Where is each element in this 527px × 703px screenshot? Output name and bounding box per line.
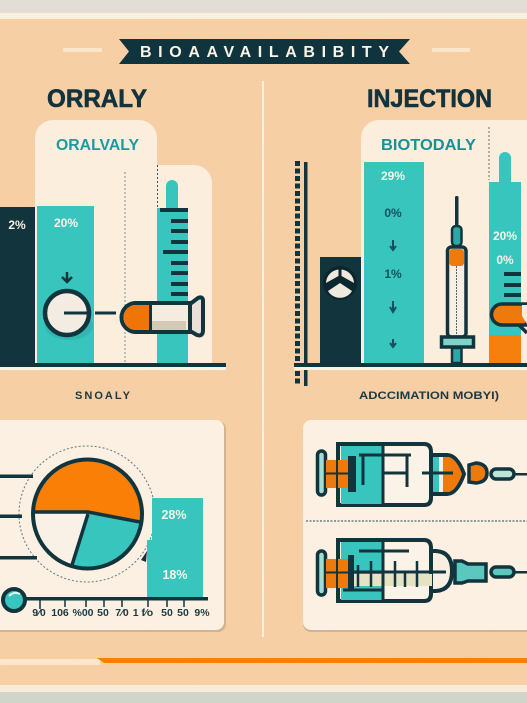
chart backdrop	[361, 120, 527, 365]
teal bar: 20%	[54, 216, 78, 230]
caption: injection: ADCCIMATION MOBYI)	[359, 390, 499, 402]
dashed guide	[488, 127, 490, 180]
panel: injection bar chart	[294, 120, 527, 386]
scale labels: 9%	[194, 607, 210, 619]
teal gauge with values: 20%	[493, 229, 517, 243]
dark bar	[0, 207, 35, 363]
caption: oral: SNOALY	[75, 390, 131, 402]
scale labels: 50	[177, 607, 189, 619]
icon: upright syringe	[442, 196, 474, 363]
scale labels: %00	[72, 607, 94, 619]
icon: capsule cropped	[492, 304, 527, 333]
scale labels: 50	[97, 607, 109, 619]
teal bar with values: 1%	[384, 267, 402, 281]
chart backdrop	[35, 120, 212, 365]
dashed ring	[19, 446, 155, 582]
arrow tip	[141, 551, 147, 562]
teal gauge with values: 0%	[496, 253, 514, 267]
title side dashes	[63, 48, 470, 52]
dotted separator	[306, 520, 527, 522]
chart label: ORALVALY	[56, 137, 139, 154]
scale labels: 9⁄0	[32, 607, 46, 619]
teal bar with values: 0%	[384, 206, 402, 220]
teal value bar	[147, 498, 203, 597]
panel: oral bar chart	[0, 120, 226, 370]
dark bar: 2%	[8, 218, 26, 232]
panel: syringes card	[303, 420, 527, 632]
teal value bar: 28%	[161, 508, 187, 522]
teal bar with values: 29%	[381, 169, 405, 183]
chart label: BIOTODALY	[381, 137, 476, 154]
pie chart	[31, 458, 144, 570]
icon: capsule	[122, 297, 203, 335]
scale labels: 1 f⁄o	[133, 607, 153, 619]
icon: syringe top	[318, 444, 527, 505]
leader lines	[0, 474, 37, 560]
card	[303, 420, 527, 632]
icon: syringe bottom	[318, 540, 527, 601]
scale labels	[32, 607, 210, 619]
teal gauge	[157, 180, 188, 363]
heading: orally: ORRALY	[47, 85, 147, 113]
scale labels: 106	[51, 607, 69, 619]
card	[0, 420, 226, 632]
dark bar with icon	[320, 257, 361, 363]
teal value bar: 18%	[162, 568, 188, 582]
title ribbon	[119, 39, 410, 64]
teal bar with values	[364, 162, 424, 363]
footer progress bar	[0, 658, 527, 665]
vertical scale	[298, 161, 308, 386]
axis	[0, 363, 226, 370]
heading: injection: INJECTION	[367, 85, 492, 113]
teal gauge with values	[489, 152, 521, 363]
center divider	[262, 81, 264, 637]
icon: down arrow	[62, 272, 72, 282]
icon: tablet	[45, 291, 116, 340]
panel: pie chart card	[0, 420, 226, 632]
scale labels: 50	[161, 607, 173, 619]
teal bar	[37, 206, 94, 363]
title ribbon: BIOAAVAILABIBITY	[140, 44, 389, 61]
dashed guides	[125, 165, 158, 362]
axis	[294, 363, 527, 370]
scale labels: 7⁄0	[115, 607, 129, 619]
scale axis	[3, 589, 208, 611]
